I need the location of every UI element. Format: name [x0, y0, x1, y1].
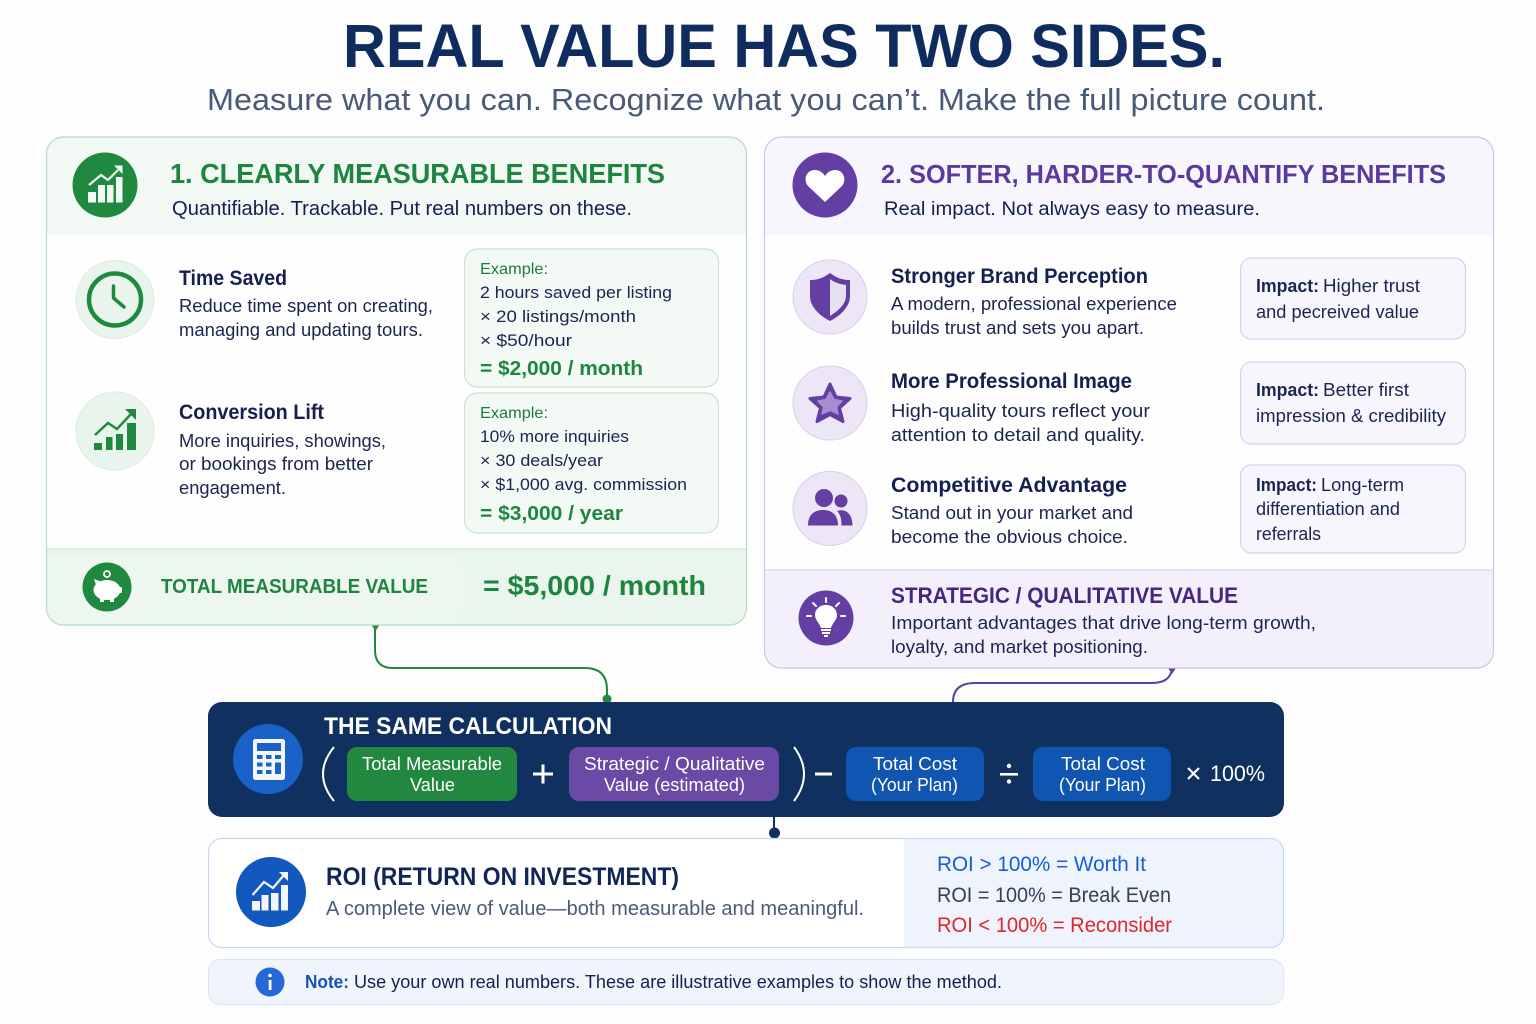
- strategic value text: Important advantages that drive long-term growth,: [891, 613, 1316, 633]
- benefit: more professional image: [891, 370, 1150, 445]
- ROI thresholds: ROI = 100% = Break Even: [937, 884, 1171, 907]
- impact box: brand perception: Higher trust: [1323, 276, 1420, 296]
- formula term: strategic value: [569, 747, 779, 801]
- benefit: more professional image: More Professional Image: [891, 370, 1132, 393]
- times 100 percent: 100%: [1210, 761, 1265, 786]
- calculation heading: THE SAME CALCULATION: [324, 713, 612, 740]
- icon: ROI chart: [236, 857, 306, 927]
- ROI thresholds: ROI < 100% = Reconsider: [937, 914, 1172, 937]
- icon: shield: [793, 260, 867, 334]
- impact box: brand perception: [1240, 258, 1466, 339]
- icon: calculator: [233, 724, 303, 794]
- formula term: strategic value: Value (estimated): [604, 775, 745, 795]
- divide sign: [1000, 764, 1018, 784]
- benefit: conversion lift: [179, 401, 386, 498]
- panel subheading: Real impact. Not always easy to measure.: [884, 199, 1260, 220]
- example box: conversion lift: = $3,000 / year: [480, 503, 623, 525]
- formula term: total cost divisor: [1033, 747, 1171, 801]
- benefit: competitive advantage: become the obvious choice.: [891, 527, 1128, 547]
- strategic value heading: STRATEGIC / QUALITATIVE VALUE: [891, 583, 1238, 608]
- impact box: brand perception: Impact:: [1256, 276, 1319, 296]
- impact box: professional image: [1240, 362, 1466, 444]
- subtitle: Measure what you can. Recognize what you can’t. Make the full picture count.: [207, 82, 1325, 117]
- connector: calculation to ROI: [769, 817, 780, 838]
- example box: time saved: Example:: [480, 261, 548, 278]
- benefit: stronger brand perception: Stronger Brand Perception: [891, 265, 1148, 288]
- example box: conversion lift: Example:: [480, 405, 548, 422]
- benefit: conversion lift: Conversion Lift: [179, 401, 324, 424]
- impact box: professional image: Impact:: [1256, 380, 1319, 400]
- formula term: total cost: (Your Plan): [871, 775, 958, 795]
- example box: time saved: 2 hours saved per listing: [480, 283, 672, 302]
- icon: light bulb: [798, 590, 854, 646]
- impact box: competitive advantage: Long-term: [1321, 475, 1404, 495]
- panel heading: 1. CLEARLY MEASURABLE BENEFITS: [170, 158, 665, 189]
- impact box: competitive advantage: Impact:: [1256, 475, 1317, 495]
- example box: conversion lift: 10% more inquiries: [480, 427, 629, 446]
- example box: time saved: = $2,000 / month: [480, 358, 643, 380]
- benefit: more professional image: attention to detail and quality.: [891, 425, 1145, 445]
- example box: conversion lift: × $1,000 avg. commission: [480, 475, 687, 494]
- impact box: competitive advantage: referrals: [1256, 524, 1321, 544]
- formula term: total measurable value: [347, 747, 517, 801]
- example box: time saved: × $50/hour: [480, 331, 572, 350]
- impact box: brand perception: and pecreived value: [1256, 302, 1419, 322]
- benefit: time saved: Reduce time spent on creating,: [179, 296, 433, 316]
- title: REAL VALUE HAS TWO SIDES.: [343, 12, 1225, 80]
- benefit: stronger brand perception: A modern, professional experience: [891, 294, 1177, 314]
- impact box: competitive advantage: differentiation and: [1256, 499, 1400, 519]
- formula term: total cost divisor: (Your Plan): [1059, 775, 1146, 795]
- icon: clock: [76, 260, 154, 338]
- benefit: time saved: [179, 267, 433, 340]
- benefit: stronger brand perception: [891, 265, 1177, 338]
- total measurable value figure: = $5,000 / month: [483, 570, 706, 601]
- formula term: total cost divisor: Total Cost: [1061, 754, 1145, 774]
- connector: measurable value to calculation: [372, 625, 612, 704]
- opening bracket: [323, 747, 334, 801]
- benefit: stronger brand perception: builds trust and sets you apart.: [891, 318, 1144, 338]
- benefit: time saved: Time Saved: [179, 267, 287, 290]
- icon: people: [793, 472, 867, 546]
- formula term: total cost: Total Cost: [873, 754, 957, 774]
- benefit: conversion lift: engagement.: [179, 478, 286, 498]
- strategic value text: loyalty, and market positioning.: [891, 637, 1148, 657]
- panel subheading: Quantifiable. Trackable. Put real numbers on these.: [172, 198, 632, 220]
- strategic value text: [891, 613, 1316, 657]
- note bar: [208, 960, 1284, 1004]
- example box: time saved: × 20 listings/month: [480, 307, 636, 326]
- icon: info: [256, 968, 284, 996]
- panel heading: 2. SOFTER, HARDER-TO-QUANTIFY BENEFITS: [881, 159, 1446, 189]
- ROI thresholds: [937, 853, 1172, 937]
- icon: star: [793, 366, 867, 440]
- closing bracket: [794, 747, 804, 801]
- panel: clearly measurable benefits: [46, 137, 746, 625]
- formula term: total cost: [846, 747, 984, 801]
- note text: Use your own real numbers. These are illustrative examples to show the method.: [354, 972, 1002, 992]
- benefit: more professional image: High-quality tours reflect your: [891, 401, 1150, 421]
- note text: Note:: [305, 972, 349, 992]
- panel: ROI: [208, 838, 1284, 948]
- panel: softer benefits: [764, 137, 1494, 668]
- benefit: competitive advantage: Competitive Advantage: [891, 474, 1127, 497]
- icon: heart badge: [792, 152, 858, 218]
- benefit: competitive advantage: [891, 474, 1133, 547]
- total measurable value label: TOTAL MEASURABLE VALUE: [161, 576, 428, 598]
- formula term: strategic value: Strategic / Qualitative: [584, 754, 765, 774]
- benefit: time saved: managing and updating tours.: [179, 320, 423, 340]
- panel: the same calculation: [208, 702, 1284, 817]
- impact box: competitive advantage: [1240, 465, 1466, 553]
- icon: piggy bank: [82, 562, 132, 612]
- icon: conversion chart: [76, 392, 154, 470]
- example box: conversion lift: × 30 deals/year: [480, 451, 603, 470]
- example box: time saved: [464, 249, 718, 387]
- plus sign: [533, 764, 553, 784]
- impact box: professional image: Better first: [1323, 380, 1409, 400]
- ROI heading: ROI (RETURN ON INVESTMENT): [326, 863, 679, 891]
- formula term: total measurable value: Total Measurable: [362, 754, 502, 774]
- benefit: conversion lift: More inquiries, showings,: [179, 431, 386, 451]
- benefit: conversion lift: or bookings from better: [179, 454, 373, 474]
- formula term: total measurable value: Value: [410, 775, 455, 795]
- example box: conversion lift: [464, 393, 718, 533]
- ROI description: A complete view of value—both measurable and meaningful.: [326, 898, 864, 920]
- minus sign: [815, 772, 832, 776]
- impact box: professional image: impression & credibility: [1256, 406, 1446, 426]
- connector: qualitative value to calculation: [953, 668, 1176, 702]
- ROI thresholds: ROI > 100% = Worth It: [937, 853, 1146, 876]
- benefit: competitive advantage: Stand out in your market and: [891, 503, 1133, 523]
- icon: growth chart badge: [72, 152, 138, 218]
